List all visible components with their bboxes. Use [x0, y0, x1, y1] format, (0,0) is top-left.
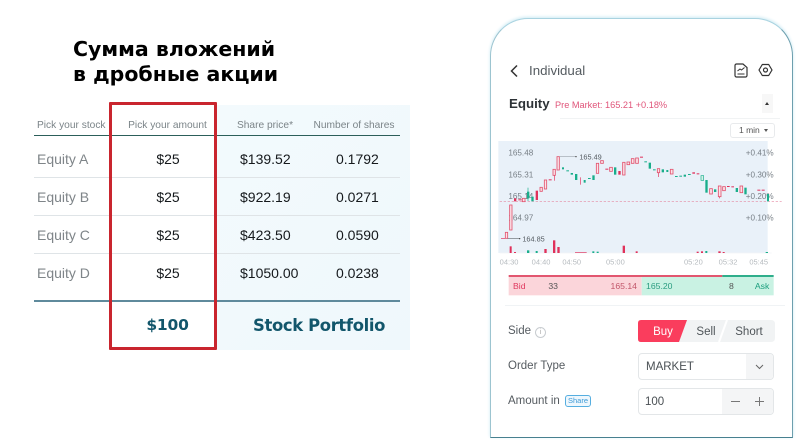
bid ask bar: 165.14 — [611, 281, 637, 291]
high price marker: 165.49 — [579, 153, 602, 162]
bid ask bar: 165.20 — [646, 281, 673, 291]
icon: settings hexagon — [758, 64, 773, 76]
price axis labels: 165.31 — [508, 170, 534, 179]
row: Equity B: 0.0271 — [336, 189, 379, 205]
time axis labels: 04:30 — [500, 257, 518, 266]
hollow red candles — [505, 157, 743, 238]
row: Equity B: $25 — [156, 189, 180, 205]
bid ask bar: Ask — [755, 281, 770, 291]
side label: Side — [508, 325, 531, 337]
title: Сумма вложений — [73, 37, 275, 61]
time axis labels: 05:45 — [749, 257, 768, 266]
row: Equity D: Equity D — [37, 265, 90, 281]
interval selector — [730, 123, 775, 138]
bid ask bar: 33 — [548, 281, 558, 291]
price axis labels: 164.97 — [508, 214, 534, 223]
side toggle: buy sell short — [638, 320, 775, 342]
row: Equity B: Equity B — [37, 189, 89, 205]
row: Equity D: $1050.00 — [240, 265, 298, 281]
side toggle: buy sell short: Buy — [653, 326, 673, 338]
phone header: back arrow — [510, 65, 518, 77]
row: Equity A — [37, 151, 379, 167]
chart background — [498, 141, 768, 253]
amount stepper: 100 — [645, 396, 664, 408]
red highlight box — [109, 102, 217, 350]
amount in label: Amount in — [508, 395, 560, 407]
volume bars — [510, 240, 725, 253]
row: Equity C: $423.50 — [240, 227, 291, 243]
side toggle: buy sell short: Sell — [696, 326, 716, 338]
side label — [508, 325, 546, 338]
row: Equity B — [37, 189, 379, 205]
stock portfolio label: Stock Portfolio — [253, 316, 385, 335]
price axis labels: 165.48 — [508, 149, 534, 158]
title: в дробные акции — [73, 62, 278, 86]
price axis labels: 165.14 — [508, 192, 534, 201]
time axis labels: 05:00 — [606, 257, 625, 266]
percentage axis labels — [746, 149, 774, 223]
row: Equity D: $25 — [156, 265, 180, 281]
low price marker — [508, 234, 545, 243]
amount in label — [508, 395, 591, 407]
row: Equity D: 0.0238 — [336, 265, 379, 281]
row: Equity D — [37, 265, 379, 281]
order type select — [638, 353, 774, 380]
table header: share price: Share price* — [237, 120, 293, 131]
green candles — [527, 161, 769, 201]
phone frame — [490, 18, 793, 438]
row: Equity C: Equity C — [37, 227, 90, 243]
row: Equity A: 0.1792 — [336, 151, 379, 167]
table header: pick your amount: Pick your amount — [128, 120, 207, 131]
side toggle: buy sell short: Short — [735, 326, 764, 338]
time axis labels: 05:32 — [719, 257, 737, 266]
percentage axis labels: +0.30% — [746, 170, 774, 179]
row: Equity C: $25 — [156, 227, 180, 243]
phone header: title: Individual — [529, 63, 585, 78]
time axis labels: 04:50 — [562, 257, 581, 266]
percentage axis labels: +0.41% — [746, 149, 774, 158]
amount in label: Share — [568, 396, 588, 405]
panel: light blue background — [217, 105, 410, 350]
percentage axis labels: +0.10% — [746, 214, 774, 223]
high price marker — [559, 153, 602, 162]
row: Equity C — [37, 227, 379, 243]
table header: number of shares: Number of shares — [314, 120, 394, 131]
table header: pick your stock: Pick your stock — [37, 120, 106, 131]
time axis labels — [500, 257, 768, 266]
total amount: $100 — [146, 316, 189, 334]
pre-market quote: Pre Market: 165.21 +0.18% — [555, 100, 667, 110]
time axis labels: 04:40 — [532, 257, 550, 266]
price axis labels — [508, 149, 534, 223]
bid ask bar: 8 — [729, 281, 734, 291]
order type label: Order Type — [508, 360, 565, 372]
row: Equity A: $25 — [156, 151, 180, 167]
equity name: Equity — [509, 96, 550, 111]
order type select: MARKET — [646, 361, 694, 373]
candlestick chart — [498, 141, 782, 296]
solid red candles and dashes — [501, 157, 765, 239]
low price marker: 164.85 — [522, 234, 545, 243]
row: Equity A: Equity A — [37, 151, 88, 167]
row: Equity C: 0.0590 — [336, 227, 379, 243]
side label: i — [540, 329, 541, 336]
title — [73, 37, 278, 86]
collapse button — [762, 94, 773, 113]
icon: chart document — [734, 63, 748, 78]
row: Equity B: $922.19 — [240, 189, 291, 205]
bid ask bar: Bid — [513, 281, 526, 291]
divider below chart — [505, 305, 785, 306]
interval selector: 1 min — [739, 125, 760, 135]
percentage axis labels: +0.20% — [746, 192, 774, 201]
amount stepper — [638, 388, 774, 415]
bid ask bar — [509, 275, 774, 295]
time axis labels: 05:20 — [684, 257, 703, 266]
row: Equity A: $139.52 — [240, 151, 291, 167]
